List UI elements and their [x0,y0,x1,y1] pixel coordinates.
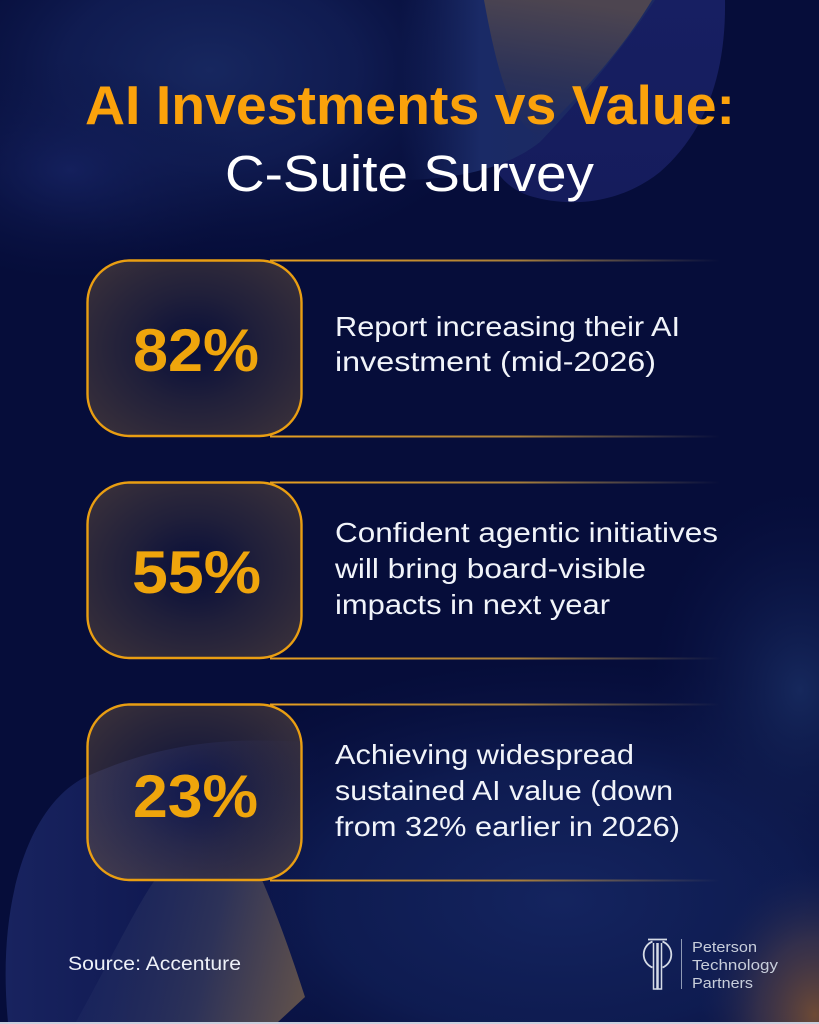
card rules [270,704,720,882]
description: sustained AI value (down [335,775,673,806]
company name [692,939,779,992]
description: investment (mid-2026) [335,346,656,377]
stat value: 23% [133,763,258,830]
source: Source: Accenture [68,954,241,975]
stat card [88,482,302,658]
description: Confident agentic initiatives [335,517,718,548]
description [335,311,680,377]
title: AI Investments vs Value: [85,74,735,136]
description: from 32% earlier in 2026) [335,811,680,842]
title: C-Suite Survey [225,145,595,202]
description: Achieving widespread [335,739,634,770]
logo [644,939,779,992]
title [85,74,735,202]
stat card [88,704,302,880]
description: impacts in next year [335,589,610,620]
panel: 55% [88,482,720,660]
description [335,739,680,842]
description [334,517,718,620]
panel: 82% [88,260,720,438]
company name: Peterson [692,939,757,956]
icon: columns and circle [644,940,671,989]
company name: Technology [692,957,779,974]
description: will bring board-visible [334,553,646,584]
card rules [270,260,720,438]
stat value: 82% [133,317,259,384]
stat card [88,260,302,436]
panel: 23% [88,704,720,882]
stat value: 55% [132,539,261,606]
divider [681,939,682,989]
description: Report increasing their AI [335,311,680,342]
company name: Partners [692,975,753,992]
card rules [270,482,720,660]
